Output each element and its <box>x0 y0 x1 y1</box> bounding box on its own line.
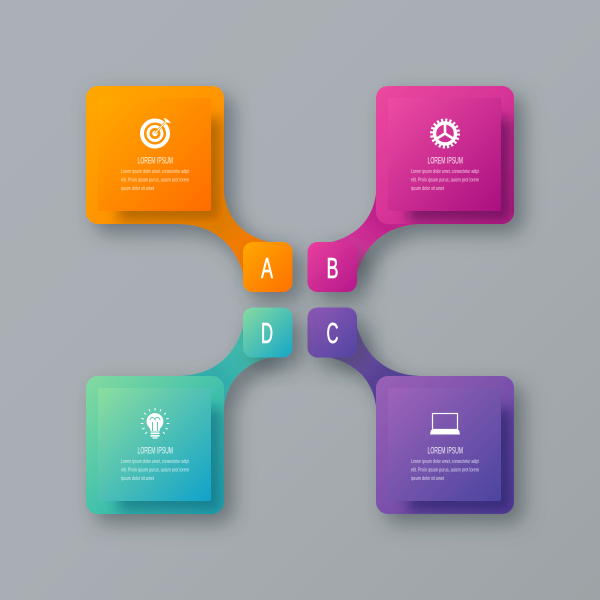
heading B: LOREM IPSUM <box>428 156 463 166</box>
panel: D <box>86 308 292 514</box>
badge D <box>243 308 292 358</box>
icon: light bulb <box>141 408 169 438</box>
text block D: ipsum dolor sit amet <box>121 476 154 482</box>
heading A: LOREM IPSUM <box>138 156 173 166</box>
text block D: Lorem ipsum dolor amet, consectetur adipi <box>121 459 189 465</box>
panel: C <box>308 308 514 514</box>
text block C <box>411 459 479 482</box>
heading D: LOREM IPSUM <box>138 446 173 456</box>
connector: card D to badge D <box>86 324 276 514</box>
heading C: LOREM IPSUM <box>428 446 463 456</box>
text block B: Lorem ipsum dolor amet, consectetur adipi <box>411 169 479 175</box>
badge C: C <box>326 318 338 350</box>
text block C: ipsum dolor sit amet <box>411 476 444 482</box>
connector: card C to badge C <box>324 324 514 514</box>
connector: card B to badge B <box>324 86 514 276</box>
text block A: Lorem ipsum dolor amet, consectetur adipi <box>121 169 189 175</box>
connector: card A to badge A <box>86 86 276 276</box>
badge A <box>243 242 292 292</box>
text block C: Lorem ipsum dolor amet, consectetur adipi <box>411 459 479 465</box>
icon: target <box>142 118 170 146</box>
icon: gear <box>432 120 458 147</box>
text block B: elit. Proin ipsum purus, auism prot lorem <box>411 178 479 184</box>
text block D <box>121 459 189 482</box>
text block A <box>121 169 189 192</box>
text block D: elit. Proin ipsum purus, auism prot lorem <box>121 468 189 474</box>
text block B <box>411 169 479 192</box>
text block A: elit. Proin ipsum purus, auism prot lorem <box>121 178 189 184</box>
text block B: ipsum dolor sit amet <box>411 186 444 192</box>
panel: B <box>308 86 514 292</box>
badge B: B <box>326 253 338 285</box>
badge A: A <box>261 253 273 285</box>
panel: A <box>86 86 292 292</box>
badge B <box>308 242 357 292</box>
text block A: ipsum dolor sit amet <box>121 186 154 192</box>
card A inner square <box>98 98 222 222</box>
card C inner square <box>388 388 512 512</box>
icon: laptop <box>430 414 460 434</box>
card D inner square <box>98 388 222 512</box>
badge C <box>308 308 357 358</box>
card B inner square <box>388 98 512 222</box>
text block C: elit. Proin ipsum purus, auism prot lorem <box>411 468 479 474</box>
badge D: D <box>261 318 273 350</box>
